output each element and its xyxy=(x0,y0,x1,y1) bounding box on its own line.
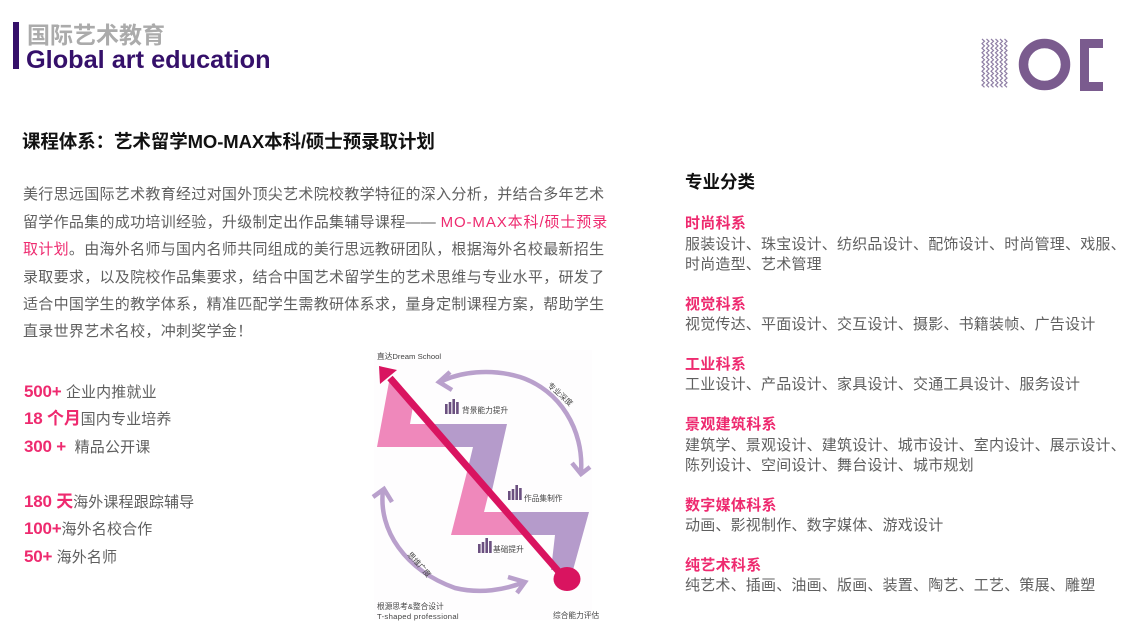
main diagonal arrow xyxy=(379,366,580,591)
visual: 视觉科系 xyxy=(685,296,746,313)
intro paragraph: 录取要求，以及院校作品集要求，结合中国艺术留学生的艺术思维与专业水平，研发了 xyxy=(23,269,604,286)
logo xyxy=(981,38,1103,91)
section heading: 课程体系：艺术留学MO-MAX本科/硕士预录取计划 xyxy=(22,131,435,152)
diagram labels: 专业深度 xyxy=(546,380,575,408)
industrial xyxy=(685,356,1080,393)
stats list xyxy=(24,382,194,566)
landscape architecture: 陈列设计、空间设计、舞台设计、城市规划 xyxy=(685,457,974,474)
bar icon: background ability xyxy=(445,399,459,414)
diagram labels: 作品集制作 xyxy=(524,493,563,503)
stats list: 180 天海外课程跟踪辅导 xyxy=(24,492,194,511)
z-path diagram xyxy=(372,351,599,621)
bar icon: foundation xyxy=(478,538,492,553)
logo circle xyxy=(1024,44,1066,86)
logo zigzag pattern xyxy=(982,39,1007,87)
intro paragraph: 取计划。由海外名师与国内名师共同组成的美行思远教研团队，根据海外名校最新招生 xyxy=(23,241,604,258)
logo bracket xyxy=(1080,39,1103,91)
fashion: 服装设计、珠宝设计、纺织品设计、配饰设计、时尚管理、戏服、 xyxy=(685,236,1126,253)
diagram labels: 综合能力评估 xyxy=(553,610,599,620)
diagram labels: 根源思考&整合设计 xyxy=(377,601,444,611)
landscape architecture: 建筑学、景观设计、建筑设计、城市设计、室内设计、展示设计、 xyxy=(685,437,1126,454)
intro paragraph xyxy=(23,186,608,340)
stats list: 100+海外名校合作 xyxy=(24,519,152,538)
stats list: 18 个月国内专业培养 xyxy=(24,409,172,428)
landscape architecture: 景观建筑科系 xyxy=(685,416,777,433)
intro paragraph: 留学作品集的成功培训经验，升级制定出作品集辅导课程—— MO-MAX本科/硕士预录 xyxy=(23,214,608,231)
accent bar xyxy=(13,22,19,69)
digital media: 数字媒体科系 xyxy=(685,497,777,514)
digital media xyxy=(685,497,943,534)
stats list: 50+ 海外名师 xyxy=(24,547,117,566)
stats list: 300 + 精品公开课 xyxy=(24,437,150,456)
fashion: 时尚造型、艺术管理 xyxy=(685,256,822,273)
bar icon: portfolio xyxy=(508,485,522,500)
stats list: 500+ 企业内推就业 xyxy=(24,382,157,401)
visual xyxy=(685,296,1095,333)
intro paragraph: 直录世界艺术名校，冲刺奖学金！ xyxy=(23,323,253,340)
diagram labels: 背景能力提升 xyxy=(462,405,508,415)
diagram labels: 思维广度 xyxy=(406,550,434,579)
diagram labels: 直达Dream School xyxy=(377,351,441,361)
diagram labels: T-shaped professional xyxy=(377,612,459,621)
fashion: 时尚科系 xyxy=(685,215,746,232)
visual: 视觉传达、平面设计、交互设计、摄影、书籍装帧、广告设计 xyxy=(685,316,1095,333)
panel: majors xyxy=(685,172,1126,594)
pink step shapes xyxy=(377,382,526,535)
industrial: 工业设计、产品设计、家具设计、交通工具设计、服务设计 xyxy=(685,376,1080,393)
fashion xyxy=(685,215,1126,273)
majors heading: 专业分类 xyxy=(685,172,755,192)
intro paragraph: 美行思远国际艺术教育经过对国外顶尖艺术院校教学特征的深入分析，并结合多年艺术 xyxy=(23,186,604,203)
diagram labels xyxy=(377,351,599,621)
fine art: 纯艺术、插画、油画、版画、装置、陶艺、工艺、策展、雕塑 xyxy=(685,577,1095,594)
landscape architecture xyxy=(685,416,1126,474)
title: chinese: 国际艺术教育 xyxy=(27,22,165,48)
digital media: 动画、影视制作、数字媒体、游戏设计 xyxy=(685,517,943,534)
bottom circular arrow xyxy=(373,489,525,593)
diagram labels: 基础提升 xyxy=(493,544,524,554)
fine art: 纯艺术科系 xyxy=(685,557,762,574)
top circular arrow xyxy=(439,372,590,474)
fine art xyxy=(685,557,1095,594)
intro paragraph: 适合中国学生的教学体系，精准匹配学生需教研体系求，量身定制课程方案，帮助学生 xyxy=(23,296,604,313)
industrial: 工业科系 xyxy=(685,356,746,373)
diagram background xyxy=(374,350,592,620)
title: english: Global art education xyxy=(26,46,271,74)
purple step shapes xyxy=(430,424,589,570)
